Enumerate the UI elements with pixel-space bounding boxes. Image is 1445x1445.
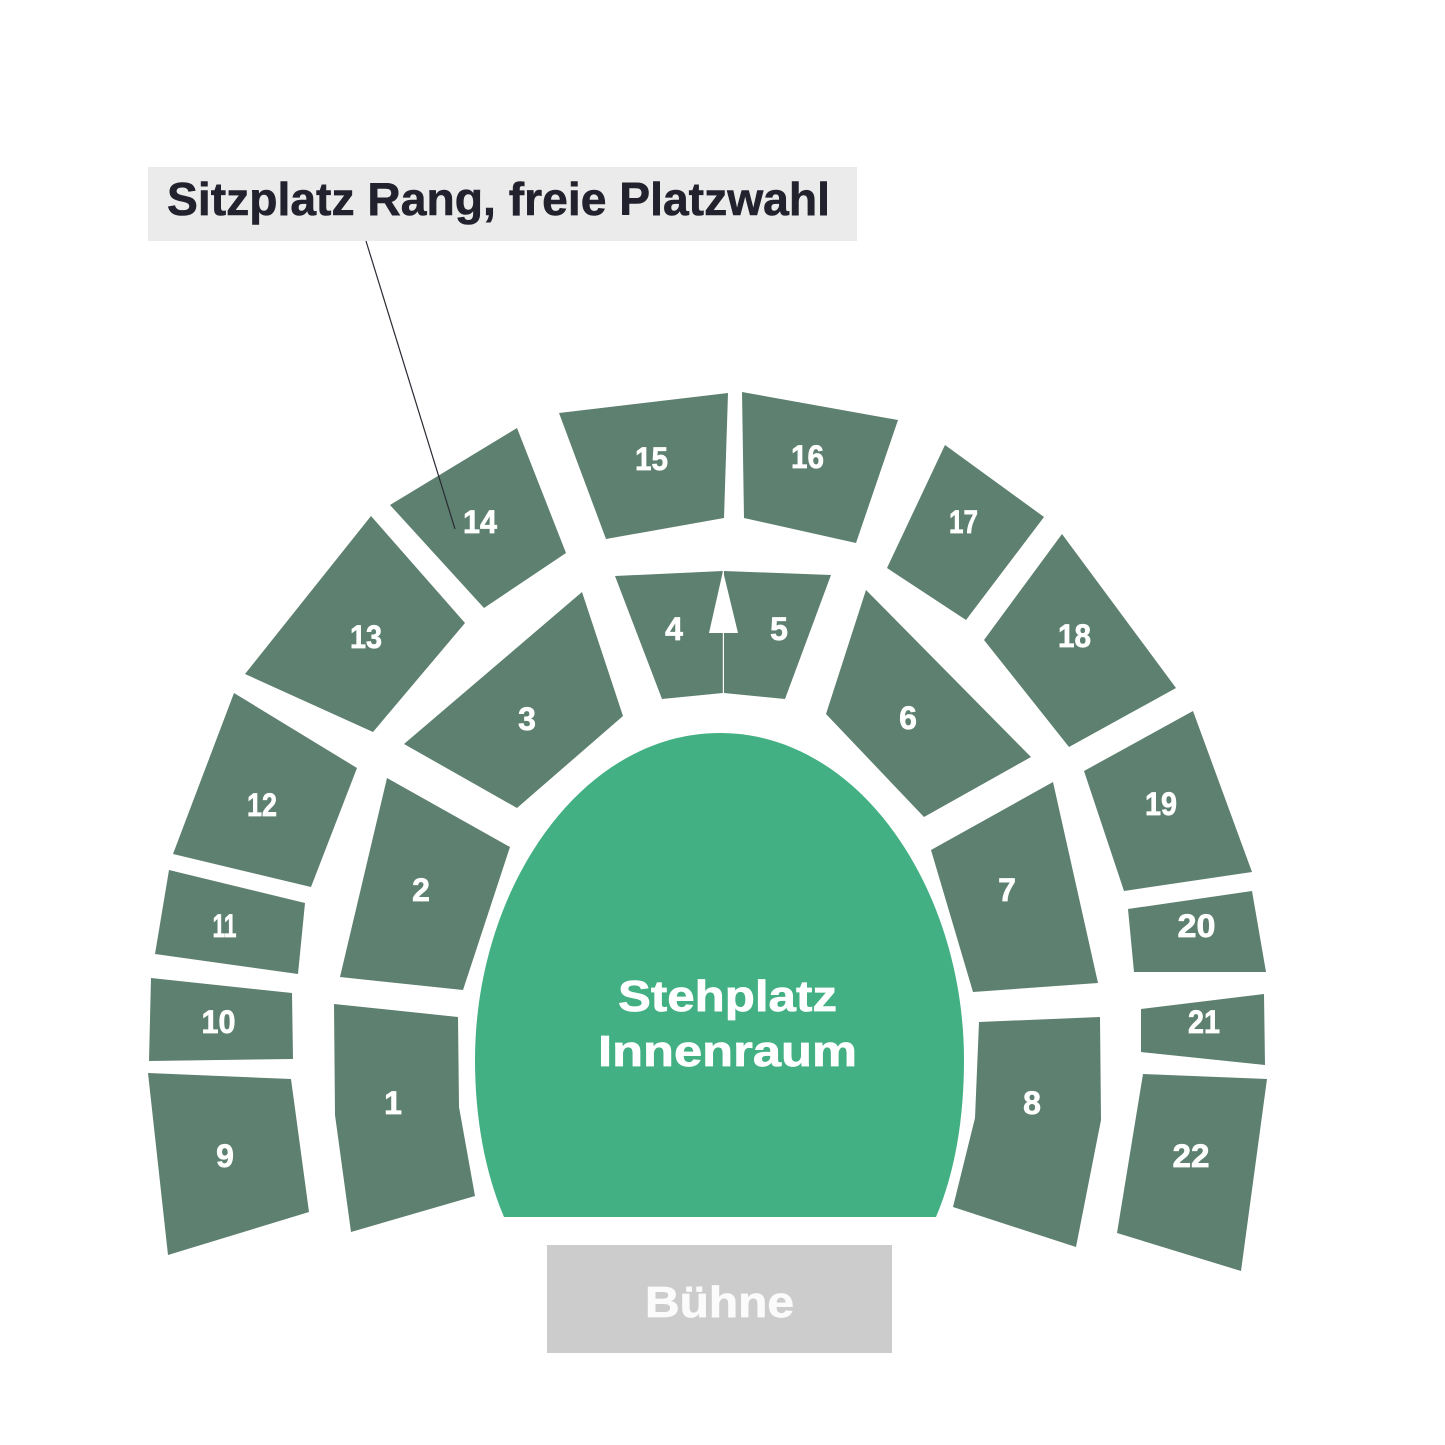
block 22: 22 [1172, 1138, 1210, 1174]
entrance arrow [709, 571, 738, 633]
block 15 [559, 393, 728, 539]
block 6: 6 [899, 700, 917, 736]
block 8: 8 [1023, 1085, 1041, 1121]
block 6 [826, 590, 1031, 817]
leader line [366, 241, 455, 529]
block 3 [404, 592, 623, 808]
block 5 [724, 571, 831, 699]
block 18: 18 [1058, 618, 1091, 654]
stage: Bühne [645, 1278, 794, 1327]
block 14 [390, 428, 566, 608]
block 2 [340, 778, 510, 990]
block 10: 10 [202, 1004, 236, 1040]
block 20: 20 [1178, 908, 1216, 944]
block 11 [155, 870, 305, 974]
block 17 [887, 445, 1044, 620]
block 9 [148, 1073, 309, 1255]
block 8 [953, 1017, 1101, 1247]
block 19: 19 [1145, 786, 1177, 822]
block 17: 17 [949, 504, 978, 540]
block 20 [1128, 891, 1266, 972]
callout label: Sitzplatz Rang, freie Platzwahl [167, 173, 830, 225]
block 2: 2 [412, 872, 430, 908]
block 16: 16 [791, 439, 824, 475]
block 12 [173, 693, 357, 887]
block 11: 11 [212, 908, 236, 944]
block 22 [1117, 1074, 1267, 1271]
block 13 [245, 516, 465, 732]
block 4 [615, 571, 723, 699]
block 3: 3 [518, 701, 536, 737]
block 4: 4 [665, 611, 683, 647]
block 7 [931, 782, 1098, 992]
block 14: 14 [463, 504, 497, 540]
block 1 [334, 1004, 475, 1232]
block 9: 9 [216, 1138, 234, 1174]
block 10 [149, 978, 293, 1061]
block 16 [742, 392, 898, 543]
block 1: 1 [384, 1085, 402, 1121]
block 19 [1084, 711, 1252, 891]
block 18 [984, 534, 1176, 747]
block 21 [1141, 994, 1265, 1065]
block 5: 5 [770, 611, 788, 647]
standing area: Innenraum: Stehplatz [618, 972, 837, 1021]
block 12: 12 [247, 787, 277, 823]
callout label [148, 167, 857, 241]
stage [547, 1245, 892, 1353]
block 7: 7 [998, 872, 1016, 908]
block 13: 13 [350, 619, 382, 655]
block 15: 15 [635, 441, 668, 477]
block 21: 21 [1188, 1004, 1220, 1040]
standing area: Innenraum: Innenraum [598, 1027, 857, 1076]
standing area: Innenraum [475, 733, 964, 1217]
